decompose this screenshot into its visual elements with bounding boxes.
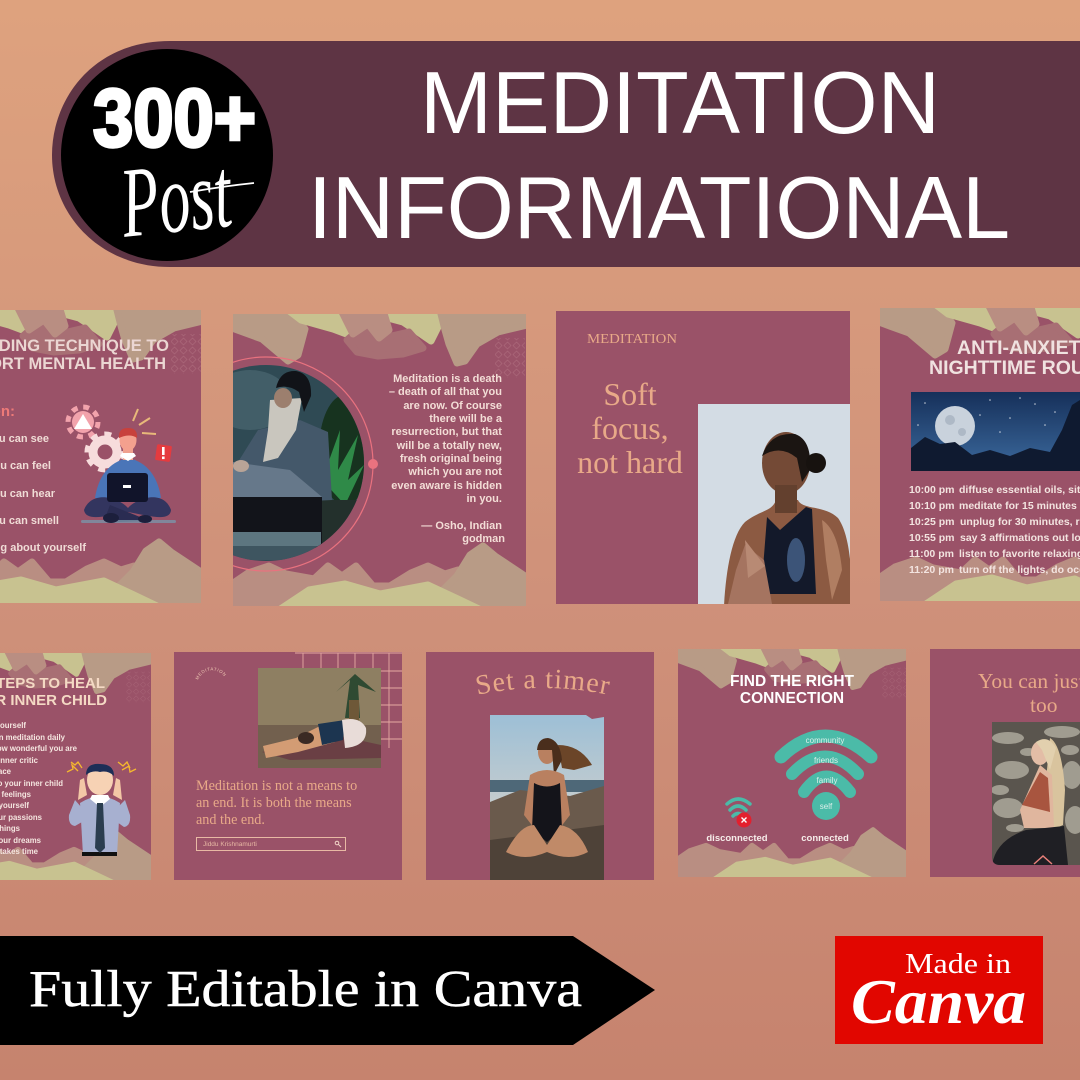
title	[308, 53, 1010, 257]
text block: quote: fresh original being	[400, 453, 502, 465]
badge: 300+ Post: 300+	[93, 73, 256, 164]
panel: means to an end	[174, 652, 402, 880]
title: MEDITATION	[420, 53, 940, 152]
label: meditation: MEDITATION	[587, 332, 677, 347]
text block: krishnamurti quote: Meditation is not a means to	[196, 778, 357, 794]
text block: routine schedule: 11:00 pm	[909, 548, 954, 560]
text block: quote: there will be a	[429, 413, 503, 425]
labels: connection states: disconnected	[706, 833, 768, 844]
panel: nighttime routine	[876, 304, 1080, 604]
search bar: attribution: Jiddu Krishnamurti	[203, 841, 257, 848]
label: arched meditation: MEDITATION	[196, 667, 226, 680]
photo: seated man in circle	[233, 365, 364, 561]
panel: Osho quote	[233, 314, 526, 606]
text block: routine schedule: 11:20 pm	[909, 564, 954, 576]
text block: quote: godman	[462, 533, 505, 545]
panel: soft focus	[556, 311, 852, 606]
panel: you can just	[930, 649, 1080, 877]
text block: you can just: too	[1030, 693, 1057, 717]
text block: routine schedule: 10:00 pm	[909, 484, 955, 496]
badge: made in Canva: Canva	[851, 966, 1026, 1037]
badge: 300+ Post: Post	[115, 137, 238, 259]
icon: large wifi signal: family	[817, 776, 837, 785]
text block: routine schedule: 10:25 pm	[909, 516, 955, 528]
photo: child's pose yoga	[258, 668, 381, 768]
text block: quote: — Osho, Indian	[421, 520, 502, 532]
badge: made in Canva: Made in	[905, 949, 1011, 980]
banner: fully editable in Canva	[0, 936, 655, 1045]
text block: soft focus: Soft	[603, 376, 657, 412]
labels: connection states: connected	[801, 833, 849, 844]
icon: large wifi signal	[781, 736, 871, 820]
icon: small disconnected wifi	[727, 799, 752, 828]
photo: woman in lotus pose	[490, 715, 604, 880]
text block: quote: in you.	[466, 493, 502, 505]
text block: routine schedule: 10:10 pm	[909, 500, 955, 512]
text block: routine schedule	[909, 484, 1080, 576]
photo: woman seated on rocks	[991, 722, 1080, 865]
text block: quote: which you are not	[407, 466, 502, 478]
text block: quote: are now. Of course	[403, 400, 502, 412]
heading: right connection: FIND THE RIGHT	[730, 673, 855, 690]
badge: made in Canva	[835, 936, 1043, 1044]
text block: krishnamurti quote: and the end.	[196, 812, 265, 828]
panel: set a timer	[426, 652, 654, 880]
text block: soft focus: not hard	[577, 444, 683, 480]
text block: grounding steps	[0, 403, 86, 554]
panel: inner child	[0, 650, 154, 884]
text block: routine schedule: meditate for 15 minutes	[959, 500, 1077, 512]
text block: krishnamurti quote: an end. It is both the means	[196, 795, 352, 811]
heading: right connection: CONNECTION	[740, 690, 844, 707]
title: INFORMATIONAL	[308, 158, 1010, 257]
panel: grounding technique	[0, 306, 207, 606]
icon: large wifi signal: community	[806, 736, 844, 745]
panel: right connection	[675, 646, 910, 880]
text block: quote: Meditation is a death	[393, 373, 502, 385]
photo: moon at night	[911, 392, 1080, 471]
search bar: attribution	[196, 838, 346, 850]
icon: stressed man	[67, 762, 136, 856]
text block: quote: resurrection, but that	[391, 426, 502, 438]
header banner	[52, 41, 1080, 267]
heading: set a timer: Set a timer	[476, 670, 610, 694]
text block: quote: even aware is hidden	[391, 480, 502, 492]
icon: stressed person with laptop	[68, 407, 176, 523]
banner: fully editable in Canva: Fully Editable in Canva	[29, 961, 582, 1018]
text block: quote: will be a totally new,	[396, 440, 502, 452]
photo: woman with hands in prayer	[698, 404, 852, 606]
icon: large wifi signal: self	[820, 802, 833, 811]
icon: large wifi signal: friends	[814, 756, 838, 765]
badge: 300+ Post	[61, 49, 273, 261]
text block: healing list	[0, 721, 78, 856]
text block: soft focus: focus,	[591, 410, 669, 446]
text block: quote: – death of all that you	[389, 386, 502, 398]
decorative ring with dot	[233, 356, 378, 572]
text block: routine schedule: 10:55 pm	[909, 532, 955, 544]
